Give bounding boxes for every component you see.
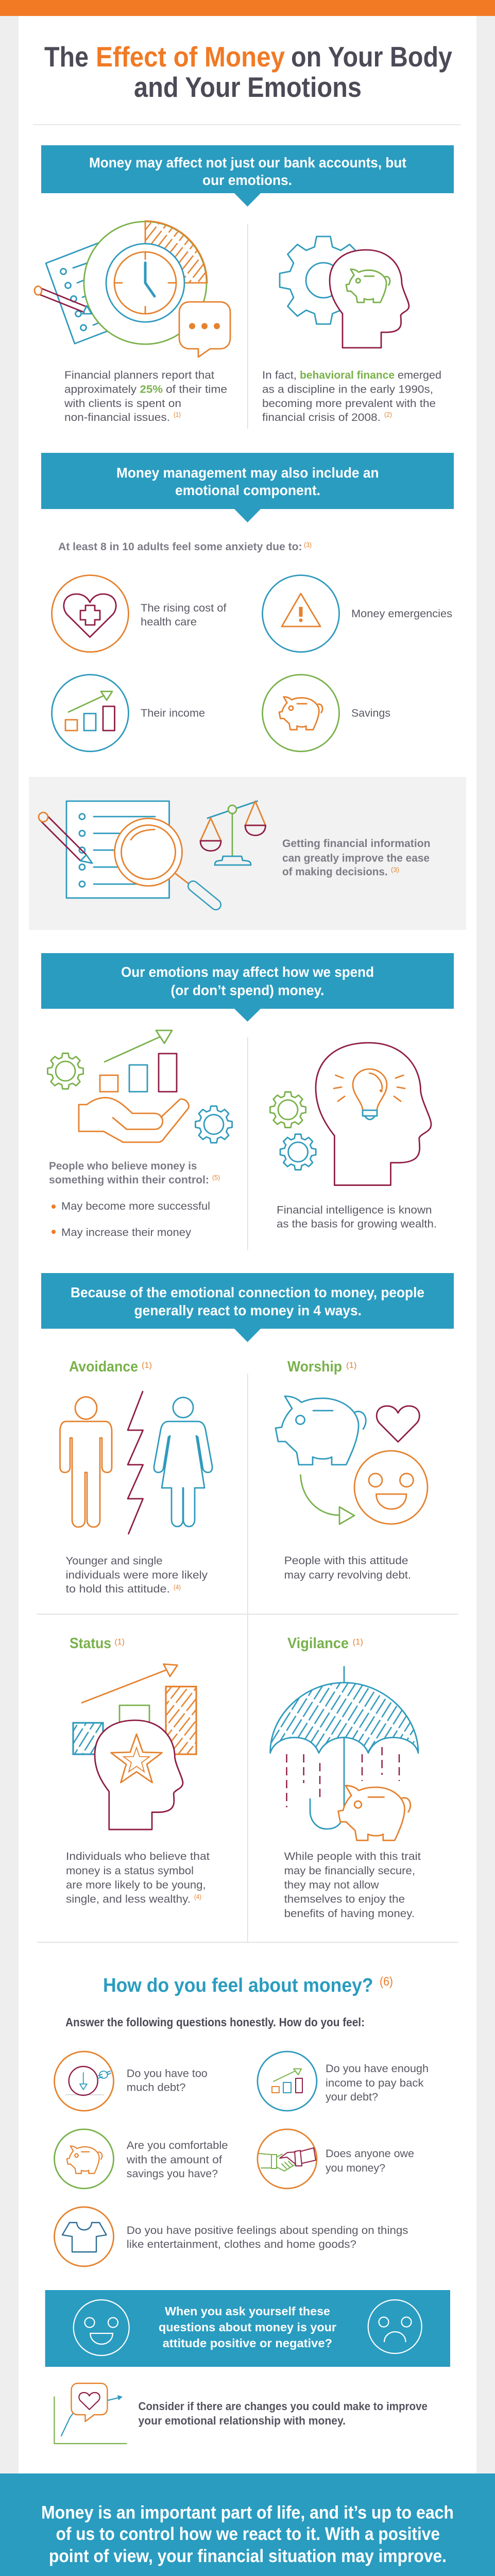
banner: closing statement xyxy=(0,2473,495,2576)
subheading: answer honestly: Answer the following questions honestly. How do you feel: xyxy=(65,2015,365,2029)
heading: status: (1) xyxy=(114,1638,125,1647)
text: money within control xyxy=(49,1160,220,1239)
banner: closing statement: Money is an important part of life, and it’s up to each xyxy=(41,2503,454,2523)
icon: head with light bulb and gears xyxy=(270,1043,431,1185)
banner: emotions affect spending xyxy=(41,953,454,1022)
icon: man and woman split by lightning xyxy=(60,1392,212,1534)
text: worship description: may carry revolving debt. xyxy=(284,1569,411,1581)
text: getting financial information: of making decisions. xyxy=(282,866,388,878)
text: status description: are more likely to be young, xyxy=(66,1879,206,1891)
icon: heart chat on growth chart xyxy=(54,2383,127,2444)
title: on Your Body xyxy=(291,41,452,73)
heading: worship: Worship xyxy=(287,1359,342,1375)
question: comfortable with savings: savings you have? xyxy=(127,2168,218,2180)
icon: head with star and bars xyxy=(73,1664,196,1829)
text: behavioral finance: (2) xyxy=(384,411,392,418)
heading: status: Status xyxy=(70,1635,111,1652)
icon: happy face xyxy=(74,2300,129,2355)
title xyxy=(44,41,452,103)
icon: health care heart xyxy=(52,575,129,652)
text: vigilance description xyxy=(284,1851,421,1920)
heading: vigilance: (1) xyxy=(353,1638,363,1647)
text: rising cost of health care xyxy=(141,602,227,628)
question: enough income: Do you have enough xyxy=(326,2063,429,2075)
text: behavioral finance: In fact, xyxy=(262,369,297,381)
text: financial intelligence: Financial intelligence is known xyxy=(277,1205,432,1216)
text: status description: (4) xyxy=(194,1893,201,1901)
icon: sad face xyxy=(368,2300,422,2353)
text: getting financial information: can greatly improve the ease xyxy=(282,852,430,865)
icon: umbrella protecting piggy from rain xyxy=(270,1667,418,1840)
text: financial planners: of their time xyxy=(166,383,227,396)
icon: income bars xyxy=(52,675,129,751)
text: vigilance description: may be financially secure, xyxy=(284,1865,415,1877)
text: financial planners xyxy=(64,369,227,423)
question: comfortable with savings xyxy=(55,2129,228,2189)
title: and Your Emotions xyxy=(134,71,362,103)
banner: four ways xyxy=(41,1273,454,1342)
icon: t-shirt xyxy=(55,2207,113,2266)
banner: money may affect xyxy=(41,145,454,207)
banner: closing statement: point of view, your financial situation may improve. xyxy=(49,2546,447,2566)
title: The xyxy=(44,41,89,73)
text: financial intelligence: as the basis for growing wealth. xyxy=(277,1218,437,1230)
banner: closing statement: of us to control how we react to it. With a positive xyxy=(56,2524,440,2544)
heading: anxiety: (3) xyxy=(304,541,312,549)
icon: piggy, heart and smiley xyxy=(276,1396,428,1524)
text: behavioral finance: financial crisis of 2008. xyxy=(262,412,381,423)
text: behavioral finance: as a discipline in the early 1990s, xyxy=(262,383,433,396)
question: comfortable with savings: with the amount of xyxy=(126,2154,222,2166)
panel: avoidance xyxy=(60,1359,212,1595)
banner: money may affect: Money may affect not just our bank accounts, but xyxy=(89,155,406,171)
text: behavioral finance xyxy=(262,369,441,423)
top orange bar xyxy=(0,0,495,16)
text: consider changes: your emotional relationship with money. xyxy=(138,2414,346,2427)
text: financial planners: with clients is spent on xyxy=(64,398,181,410)
text: financial planners: Financial planners report that xyxy=(64,369,214,381)
text: financial planners: (1) xyxy=(174,411,181,418)
icon: balance scale xyxy=(200,801,266,865)
text: attitude question: attitude positive or negative? xyxy=(163,2336,332,2350)
question: enough income: your debt? xyxy=(326,2091,378,2103)
text: status description: single, and less wealthy. xyxy=(66,1893,191,1905)
text: financial planners: non-financial issues. xyxy=(64,412,170,423)
text: financial planners: approximately xyxy=(64,383,137,396)
icon: piggy small xyxy=(55,2129,113,2189)
text: financial intelligence xyxy=(277,1205,437,1230)
question: enough income xyxy=(258,2052,429,2111)
question: too much debt: much debt? xyxy=(127,2082,185,2094)
text: rising cost of health care: The rising cost of xyxy=(141,602,227,614)
text: vigilance description: While people with this trait xyxy=(284,1851,421,1862)
icon: handshake xyxy=(258,2129,317,2189)
panel: vigilance xyxy=(270,1635,421,1920)
text: consider changes xyxy=(138,2400,428,2427)
text: financial planners: 25% xyxy=(140,383,163,396)
text: worship description: People with this attitude xyxy=(284,1555,408,1567)
text: behavioral finance: becoming more prevalent with the xyxy=(262,398,436,410)
text: status description: money is a status symbol xyxy=(66,1865,194,1877)
text: their income: Their income xyxy=(141,707,205,719)
text: getting financial information: (3) xyxy=(391,866,399,874)
text: avoidance description: to hold this attitude. xyxy=(66,1583,170,1595)
text: vigilance description: benefits of having money. xyxy=(284,1908,415,1920)
question: positive feelings about spending: like entertainment, clothes and home goods? xyxy=(127,2239,356,2250)
heading: anxiety: At least 8 in 10 adults feel some anxiety due to: xyxy=(58,541,302,553)
banner: emotions affect spending: (or don’t spend) money. xyxy=(171,982,325,998)
panel: financial information xyxy=(29,777,466,930)
text: getting financial information xyxy=(282,838,431,878)
text: behavioral finance: behavioral finance xyxy=(300,369,395,381)
question: too much debt xyxy=(55,2052,208,2111)
heading: how do you feel about money: How do you feel about money? xyxy=(103,1975,373,1996)
question: positive feelings about spending: Do you have positive feelings about spending on things xyxy=(127,2225,408,2236)
text: money within control: something within their control: xyxy=(49,1174,209,1186)
text: avoidance description: Younger and single xyxy=(66,1555,163,1567)
text: avoidance description: individuals were more likely xyxy=(66,1569,208,1581)
heading: vigilance: Vigilance xyxy=(287,1635,349,1652)
banner: money may affect: our emotions. xyxy=(202,172,292,188)
text: rising cost of health care: health care xyxy=(141,616,197,628)
text: savings: Savings xyxy=(351,707,390,719)
question: anyone owe you money xyxy=(258,2129,414,2189)
heading: how do you feel about money: (6) xyxy=(380,1975,393,1989)
text: avoidance description: (4) xyxy=(174,1583,181,1591)
question: anyone owe you money: you money? xyxy=(326,2162,385,2174)
icon: document with magnifier and pencil xyxy=(37,801,216,905)
text: status description: Individuals who believe that xyxy=(66,1851,210,1862)
text: attitude question: When you ask yourself these xyxy=(165,2304,330,2318)
text: money within control: People who believe money is xyxy=(49,1160,197,1172)
heading: avoidance: Avoidance xyxy=(69,1359,138,1375)
question: anyone owe you money: Does anyone owe xyxy=(326,2148,414,2160)
text: attitude question xyxy=(159,2304,336,2350)
banner: four ways: generally react to money in 4 ways. xyxy=(134,1302,362,1318)
text: vigilance description: they may not allow xyxy=(284,1879,379,1891)
text: consider changes: Consider if there are changes you could make to improve xyxy=(138,2400,428,2413)
heading: avoidance: (1) xyxy=(142,1361,152,1370)
icon: gear and head with piggy bank xyxy=(280,236,409,348)
text: behavioral finance: emerged xyxy=(398,369,441,381)
question: positive feelings about spending xyxy=(55,2207,408,2266)
question: comfortable with savings: Are you comfortable xyxy=(127,2140,228,2151)
text: worship description xyxy=(284,1555,411,1581)
bullet: increase money: May increase their money xyxy=(61,1227,192,1239)
icon: hand holding growth chart with gears xyxy=(47,1030,232,1143)
icon: income bars small xyxy=(258,2052,317,2111)
panel: worship xyxy=(276,1359,428,1581)
icon: clock with paper, pencil and chat bubble xyxy=(35,221,230,357)
question: too much debt: Do you have too xyxy=(127,2068,208,2080)
icon: savings piggy xyxy=(263,675,339,751)
icon: warning triangle xyxy=(263,575,339,652)
banner: emotions affect spending: Our emotions may affect how we spend xyxy=(121,964,374,980)
bullet: more successful: May become more successful xyxy=(61,1200,210,1212)
banner: money management xyxy=(41,453,454,522)
text: attitude question: questions about money is your xyxy=(159,2320,336,2334)
title: Effect of Money xyxy=(96,41,285,73)
text: getting financial information: Getting financial information xyxy=(282,838,431,850)
banner: four ways: Because of the emotional connection to money, people xyxy=(71,1284,424,1300)
text: money emergencies: Money emergencies xyxy=(351,608,452,620)
text: money within control: (5) xyxy=(212,1174,220,1181)
text: vigilance description: themselves to enjoy the xyxy=(284,1893,405,1905)
question: enough income: income to pay back xyxy=(326,2077,424,2089)
banner: money management: emotional component. xyxy=(175,482,320,498)
text: avoidance description xyxy=(66,1555,208,1595)
text: status description xyxy=(66,1851,210,1905)
banner: money management: Money management may also include an xyxy=(116,465,379,481)
panel: status xyxy=(66,1635,210,1905)
heading: worship: (1) xyxy=(346,1361,356,1370)
icon: ball and chain xyxy=(55,2052,113,2111)
panel: positive or negative attitude xyxy=(45,2290,450,2367)
